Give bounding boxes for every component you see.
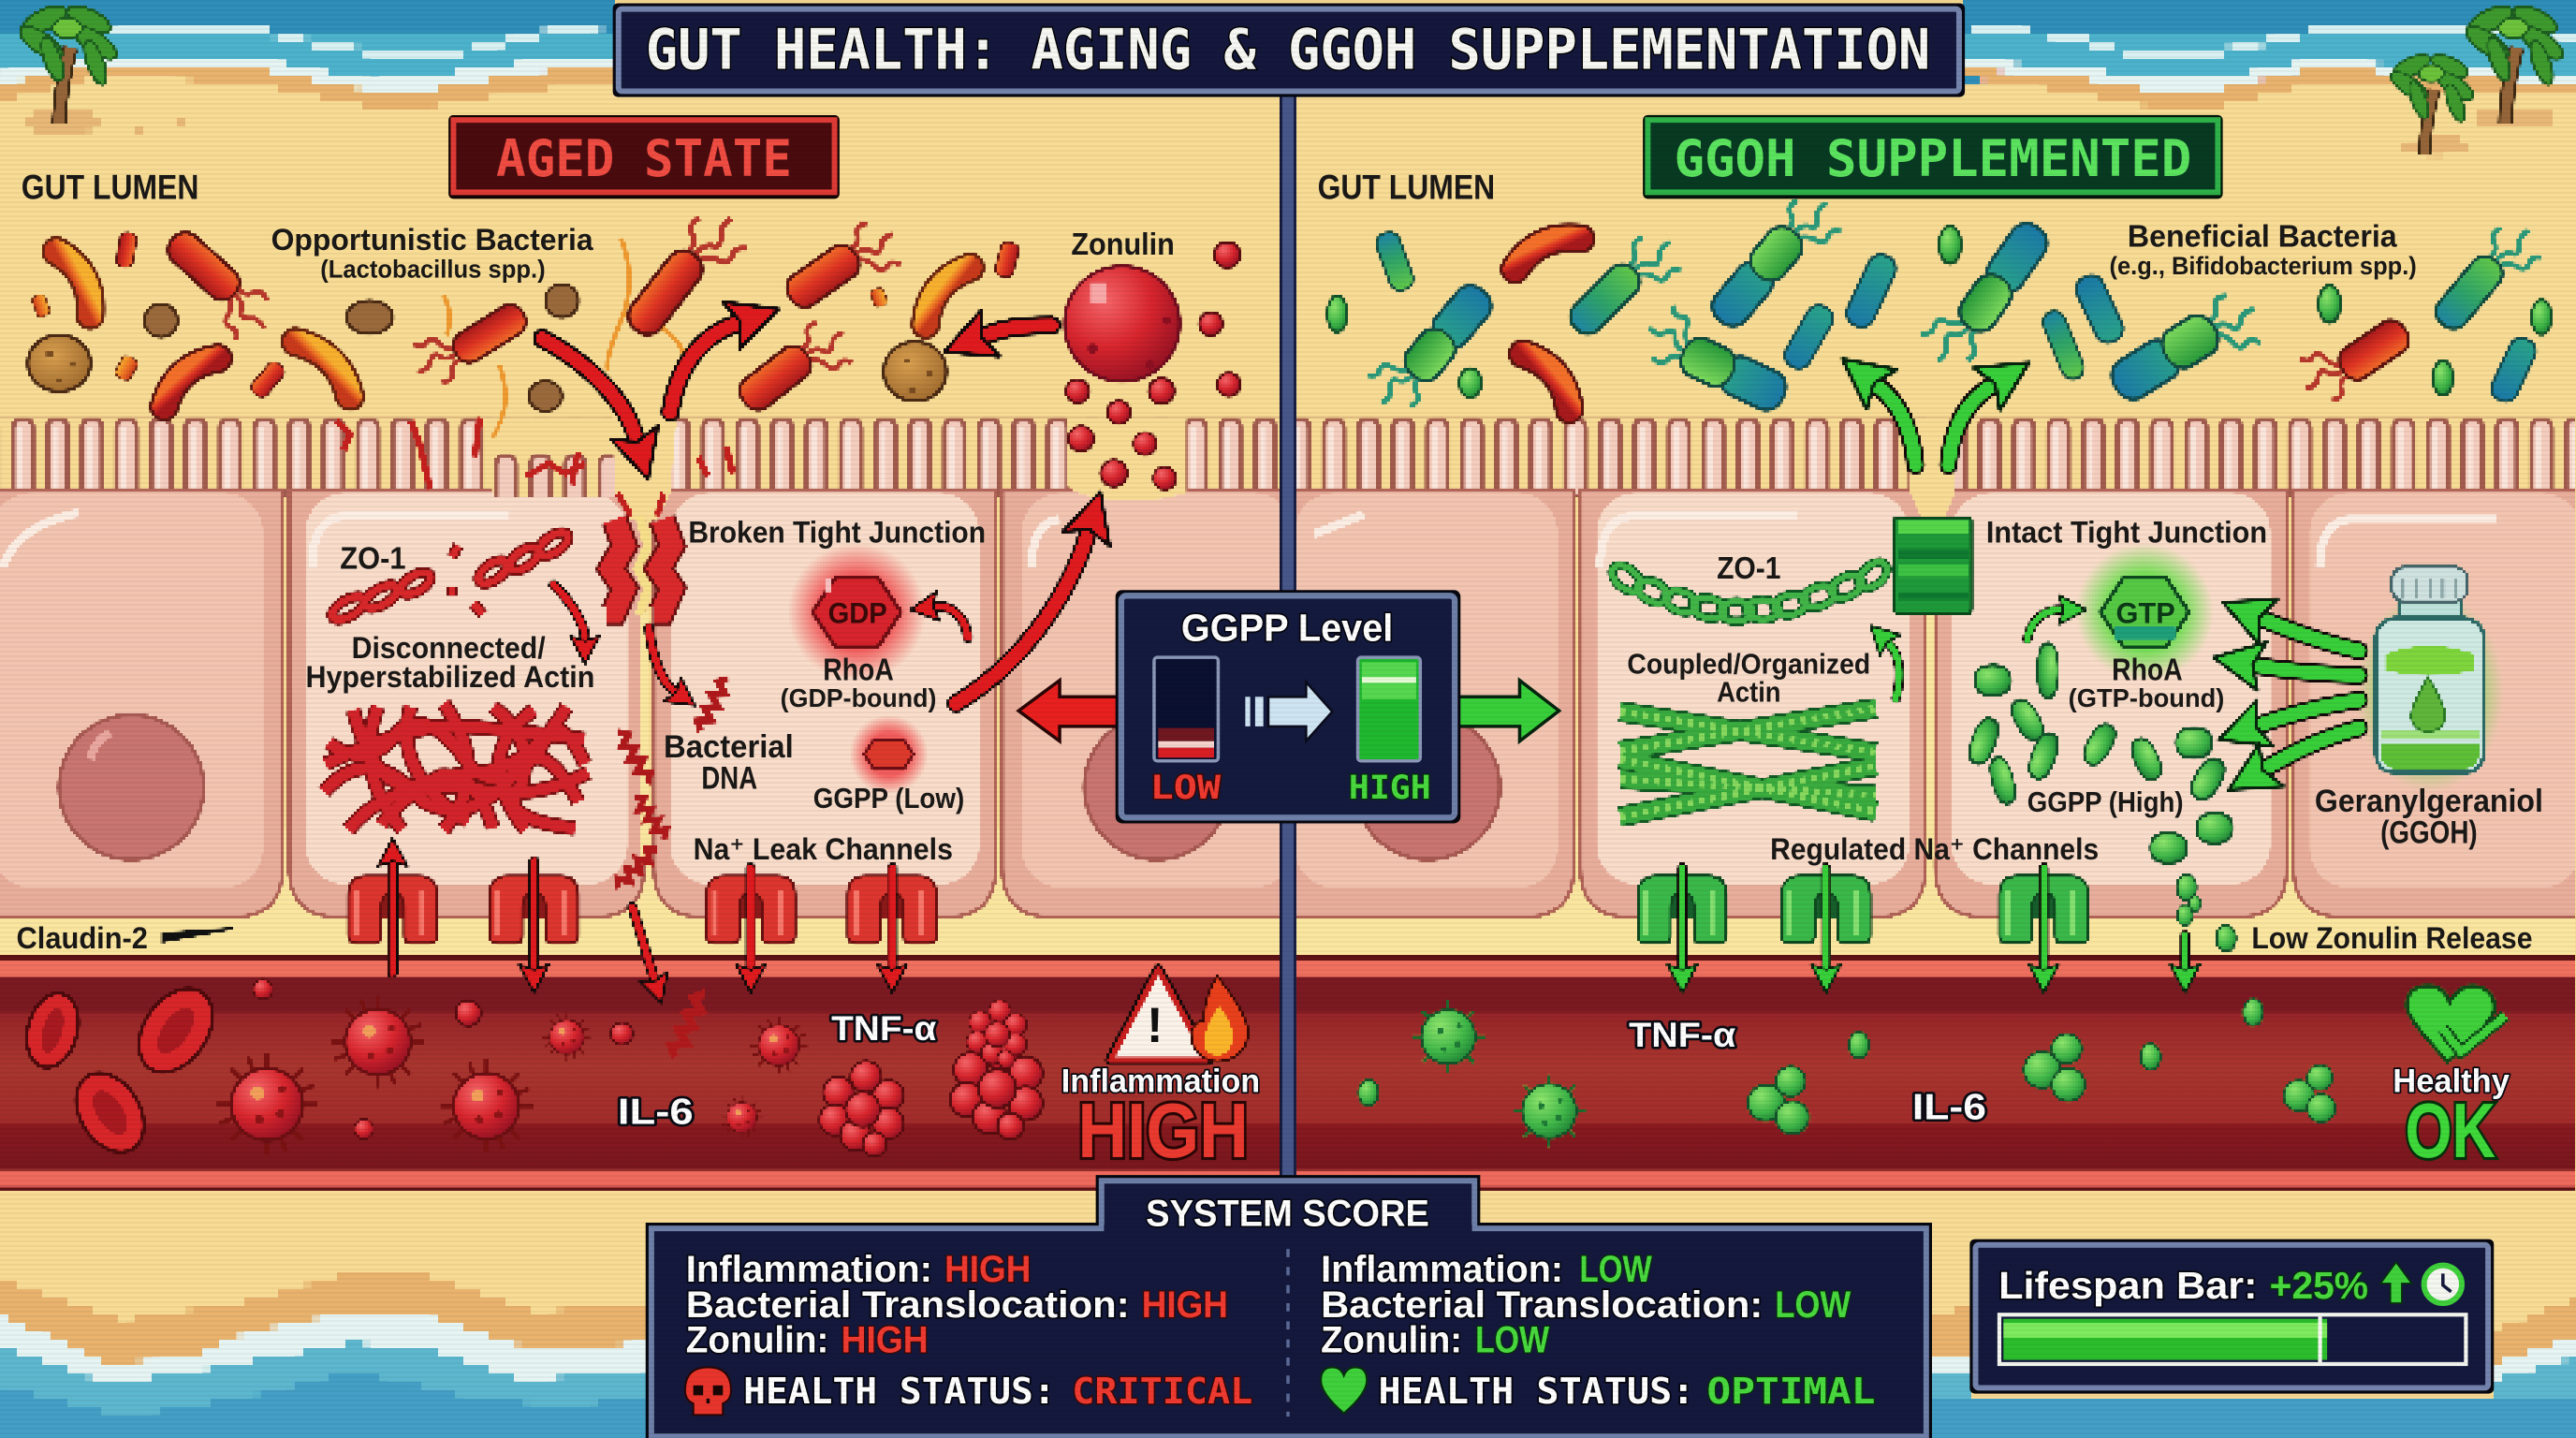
organized actin (1620, 709, 1876, 816)
GGPP low pill (849, 715, 929, 794)
panel: GGPP level: GGPP Level (1181, 607, 1393, 650)
text labels: GGOH side: Low Zonulin Release (2251, 921, 2532, 955)
scores: aged: HIGH (1142, 1284, 1228, 1326)
block arrow: GGOH direction (1456, 681, 1559, 741)
icon: heart (1321, 1367, 1367, 1414)
panel: lifespan bar: +25% (2270, 1264, 2368, 1307)
text labels: GGOH side: Intact Tight Junction (1986, 515, 2267, 549)
text labels: GGOH side: (GTP-bound) (2069, 683, 2224, 712)
block arrow: aged direction (1018, 681, 1120, 741)
vessel cells right (1358, 999, 2335, 1148)
text labels: GGOH side: TNF-α (1629, 1016, 1736, 1054)
Na leak channels (348, 876, 936, 944)
text labels: aged state: Hyperstabilized Actin (305, 660, 594, 694)
title: GUT HEALTH: AGING & GGOH SUPPLEMENTATION (646, 19, 1930, 83)
scores: supplemented: LOW (1475, 1320, 1550, 1361)
basal strip left (0, 829, 1281, 955)
icon: warning triangle (1110, 970, 1208, 1060)
villi row left (0, 418, 1281, 496)
icon: flame (1191, 976, 1249, 1062)
scores: supplemented: LOW (1580, 1249, 1652, 1290)
icon: palm tree left (15, 1, 121, 124)
state badge: GGOH supplemented (1643, 115, 2223, 198)
text labels: GGOH side: IL-6 (1912, 1087, 1986, 1127)
text labels: GGOH side: Actin (1717, 676, 1781, 709)
text labels: GGOH side: OK (2405, 1088, 2496, 1174)
text labels: aged state: Opportunistic Bacteria (271, 223, 594, 257)
GGPP high pills (1965, 643, 2232, 926)
decorative sand blotches (22, 107, 2553, 156)
text labels: GGOH side: ZO-1 (1717, 551, 1781, 586)
broken tight junction (607, 516, 672, 861)
epithelial cells right (1286, 490, 2576, 917)
scores: aged: HIGH (842, 1320, 929, 1361)
opportunistic bacteria group (28, 204, 1020, 437)
panel: lifespan bar: Lifespan Bar: (1998, 1264, 2258, 1307)
claudin-2 pointer (163, 929, 233, 942)
text labels: aged state: GUT LUMEN (22, 168, 198, 206)
icon: green heart with check (2407, 986, 2506, 1062)
broken villi and blood damage (337, 414, 1186, 520)
text labels: GGOH side: Coupled/Organized (1627, 648, 1870, 681)
beneficial bacteria group (1327, 188, 2552, 418)
text labels: aged state: (Lactobacillus spp.) (320, 255, 546, 284)
intact tight junction block (1895, 518, 1971, 613)
scores: supplemented: LOW (1775, 1284, 1852, 1326)
text labels: aged state: DNA (701, 761, 757, 797)
scores: aged: Zonulin: (686, 1320, 828, 1361)
actin tangle (324, 703, 588, 829)
vertical divider (1280, 92, 1296, 1183)
title (613, 4, 1965, 97)
text labels: aged state: HIGH (1077, 1088, 1249, 1174)
scores: supplemented: Bacterial Translocation: (1321, 1284, 1763, 1326)
text labels: GGOH side: Regulated Na⁺ Channels (1770, 832, 2099, 866)
panel: system score: SYSTEM SCORE (1146, 1194, 1429, 1235)
RhoA GTP hexagon (2076, 543, 2214, 682)
arrows: aged state pathway (392, 324, 1088, 977)
scores: supplemented (1321, 1249, 1875, 1413)
vessel cells left (19, 975, 1043, 1165)
panel: GGPP level: HIGH (1349, 769, 1431, 807)
icon: clock (2424, 1266, 2462, 1303)
blood vessel right (1295, 955, 2576, 1190)
text labels: aged state: TNF-α (831, 1009, 937, 1048)
progress bar (1999, 1314, 2466, 1364)
scores: supplemented: HEALTH STATUS: (1379, 1371, 1694, 1413)
text labels: aged state: Inflammation (1061, 1063, 1260, 1099)
nucleus cell 4 left (1084, 715, 1229, 859)
state badge: GGOH supplemented: GGOH SUPPLEMENTED (1674, 128, 2191, 188)
text labels: aged state: (GDP-bound) (781, 683, 936, 712)
text labels: aged state: GGPP (Low) (813, 782, 964, 814)
low zonulin dot (2217, 925, 2236, 951)
text labels: GGOH side: (GGOH) (2380, 815, 2478, 851)
scores: aged: Bacterial Translocation: (686, 1284, 1130, 1326)
bacterial DNA fragments (612, 675, 732, 1060)
scores: supplemented: Zonulin: (1321, 1320, 1462, 1361)
text labels: aged state: Na⁺ Leak Channels (694, 832, 953, 866)
gauge: high (1358, 657, 1420, 761)
text labels: aged state: IL-6 (618, 1093, 694, 1133)
nucleus cell 1 left (59, 715, 204, 859)
panel: GGPP level (1116, 590, 1460, 823)
nucleus right (1355, 715, 1500, 859)
text labels: aged state: Claudin-2 (17, 921, 148, 955)
text labels: GGOH side: GUT LUMEN (1318, 168, 1495, 206)
text labels: aged state: Zonulin (1071, 227, 1175, 262)
text labels: GGOH side: GTP (2116, 595, 2175, 629)
state badge: aged: AGED STATE (496, 128, 792, 188)
text labels: GGOH side: RhoA (2112, 653, 2183, 688)
scores: aged: HEALTH STATUS: (743, 1371, 1056, 1413)
ocean: bottom shoreline (0, 1272, 2576, 1438)
scores: aged: Inflammation: (686, 1249, 932, 1290)
text labels: aged state: RhoA (823, 653, 894, 688)
icon: palm tree right small (2387, 51, 2477, 154)
basal strip right (1295, 829, 2576, 955)
zo-1 intact chain (1607, 557, 1892, 622)
gauge: low (1154, 657, 1218, 761)
panel: GGOH supplemented (1286, 168, 2576, 1190)
text labels: GGOH side: (e.g., Bifidobacterium spp.) (2110, 251, 2417, 280)
panel: aged state (0, 168, 1293, 1190)
epithelial cells left (0, 490, 1293, 917)
regulated Na channels (1638, 876, 2088, 944)
text labels: aged state: ! (1147, 998, 1164, 1053)
ocean: top shoreline (0, 0, 2576, 107)
scores: aged (686, 1249, 1252, 1413)
icon: palm tree right large (2462, 1, 2568, 124)
text labels: aged state: ZO-1 (340, 541, 406, 576)
text labels: aged state (17, 168, 1260, 1174)
arrow: low to high (1245, 682, 1332, 741)
scores: supplemented: Inflammation: (1321, 1249, 1563, 1290)
text labels: aged state: Disconnected/ (352, 631, 546, 665)
text labels: GGOH side: Healthy (2393, 1063, 2510, 1099)
intact junction channel (1925, 611, 1934, 858)
panel: GGPP level: LOW (1150, 769, 1222, 807)
icon: zonulin particles (1064, 242, 1240, 490)
panel: lifespan bar (1969, 1240, 2494, 1394)
text labels: GGOH side: Geranylgeraniol (2315, 784, 2543, 819)
text labels: aged state: Broken Tight Junction (688, 515, 986, 549)
text labels: GGOH side: Beneficial Bacteria (2128, 219, 2397, 254)
icon: skull (685, 1367, 731, 1415)
scores: aged: HIGH (944, 1249, 1031, 1290)
scores: supplemented: OPTIMAL (1707, 1371, 1875, 1413)
state badge: aged (448, 115, 840, 198)
zo-1 broken chain (329, 528, 572, 624)
icon: up arrow (2380, 1262, 2411, 1303)
scores: aged: CRITICAL (1072, 1371, 1252, 1413)
blood vessel left (0, 955, 1281, 1190)
icon: GGOH bottle (2356, 567, 2504, 792)
text labels: aged state: Bacterial (664, 729, 794, 765)
panel: system score (646, 1175, 1932, 1438)
text labels: GGOH side (1318, 168, 2543, 1174)
RhoA GDP hexagon (788, 543, 926, 682)
text labels: GGOH side: GGPP (High) (2027, 785, 2184, 818)
text labels: aged state: GDP (828, 595, 887, 629)
villi row right (1295, 418, 2576, 496)
villi gap right (1908, 418, 1956, 520)
arrows: GGOH pathway (1682, 387, 2359, 966)
